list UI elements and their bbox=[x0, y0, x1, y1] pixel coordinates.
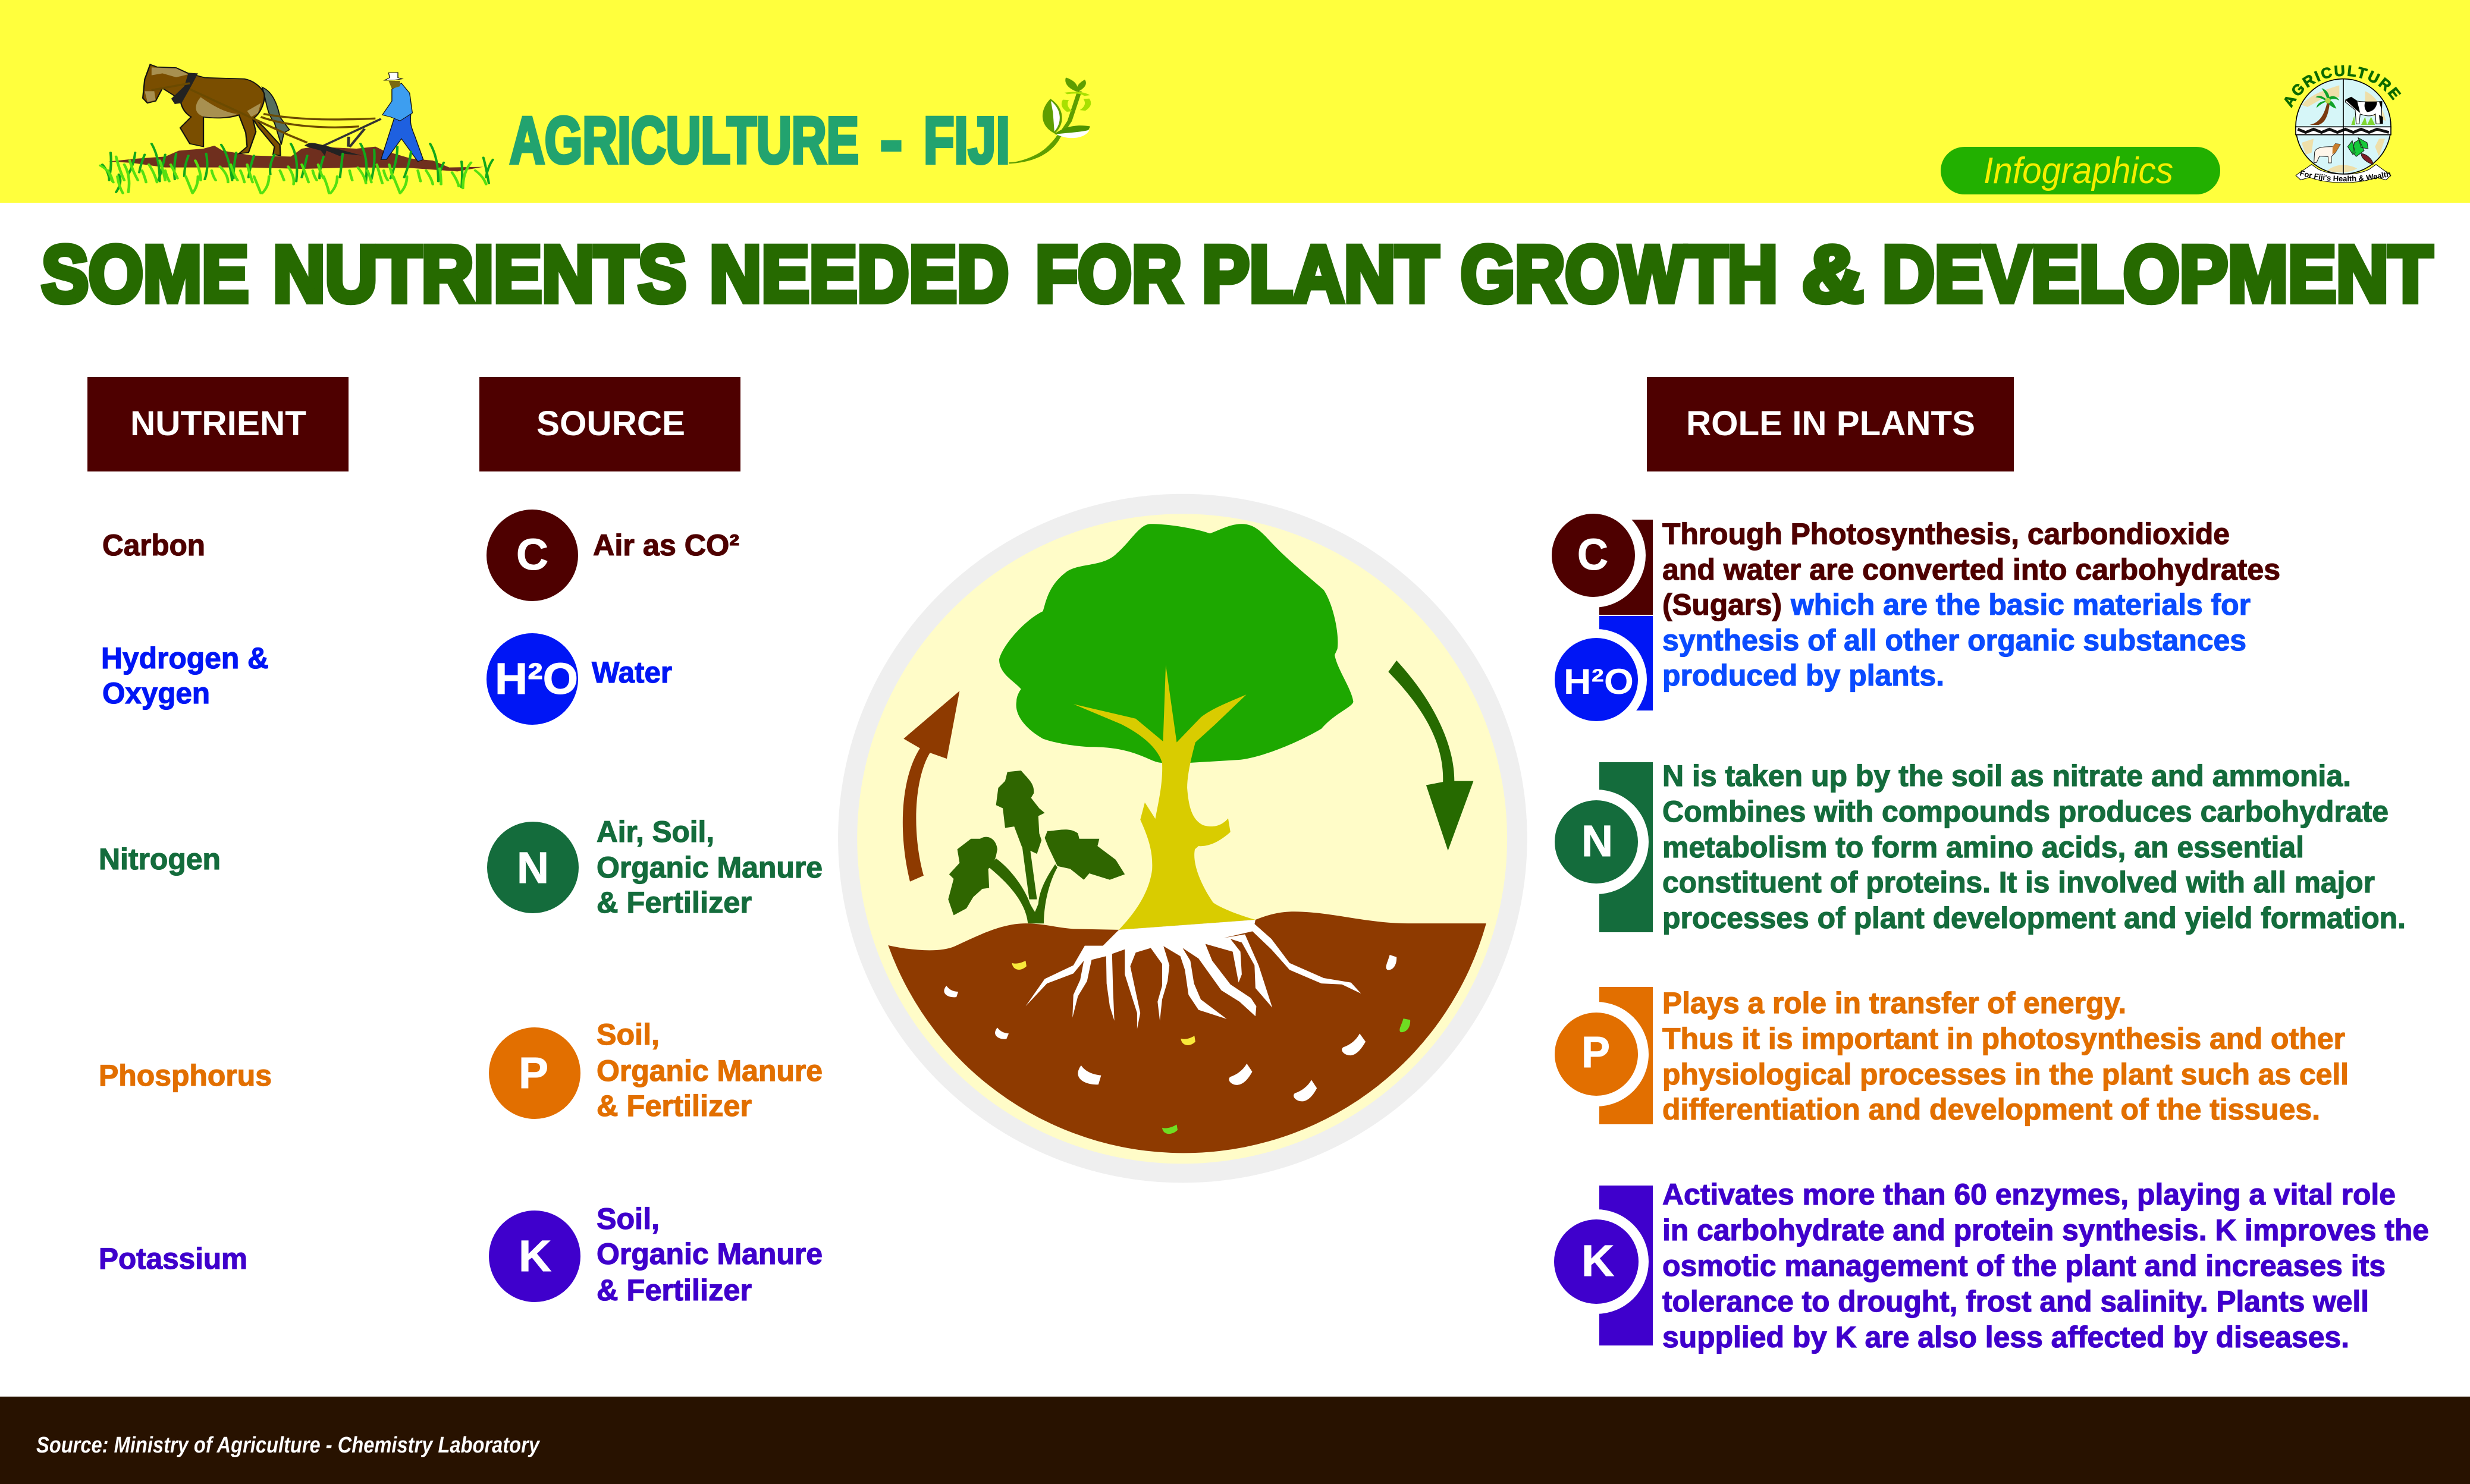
crest text top: AGRICULTURE bbox=[2284, 65, 2402, 108]
tree canopy bbox=[999, 524, 1353, 763]
source: carbon: C bbox=[516, 530, 548, 579]
role text: phosphorus: physiological processes in the plant such as cell bbox=[1662, 1058, 2349, 1091]
column header: Source: SOURCE bbox=[536, 404, 685, 443]
role text: carbon and water: produced by plants. bbox=[1662, 659, 1944, 692]
arrow: down green bbox=[1388, 661, 1473, 851]
nutrient names: Phosphorus bbox=[99, 1059, 272, 1092]
role icon: carbon and water: C bbox=[1577, 530, 1608, 579]
arrow: up brown bbox=[903, 691, 959, 882]
pale background disc bbox=[857, 514, 1507, 1164]
role text: potassium: osmotic management of the plant and increases its bbox=[1662, 1249, 2386, 1282]
header band bbox=[0, 0, 2470, 203]
title: GROWTH bbox=[1461, 230, 1778, 319]
source: carbon bbox=[487, 510, 739, 601]
role text: carbon and water: and water are converted into carbohydrates bbox=[1662, 553, 2280, 586]
role text: nitrogen: constituent of proteins. It is involved with all major bbox=[1662, 866, 2375, 899]
title: FOR bbox=[1035, 230, 1182, 319]
plough bbox=[324, 119, 381, 147]
role text: nitrogen bbox=[1662, 759, 2406, 935]
title: NEEDED bbox=[710, 230, 1009, 319]
role icon: carbon and water bbox=[1541, 503, 1653, 730]
palm tree bbox=[2309, 101, 2330, 125]
illustration: farmer ploughing with horse bbox=[100, 64, 493, 193]
badge: Infographics: Infographics bbox=[1983, 150, 2173, 191]
source: nitrogen bbox=[487, 815, 823, 919]
role icon: potassium bbox=[1544, 1186, 1653, 1345]
icon: leaf sprig bbox=[1009, 77, 1090, 163]
central illustration: tree and soil cycle bbox=[838, 494, 1527, 1183]
crest disc bbox=[2296, 79, 2391, 174]
role text: phosphorus: Thus it is important in photosynthesis and other bbox=[1662, 1022, 2345, 1055]
role text: potassium: supplied by K are also less affected by diseases. bbox=[1662, 1320, 2349, 1354]
source: nitrogen: & Fertilizer bbox=[597, 886, 752, 919]
source: potassium: & Fertilizer bbox=[597, 1274, 752, 1307]
role text: potassium bbox=[1662, 1178, 2429, 1354]
footer band with source: Source: Ministry of Agriculture - Chemistry Laboratory bbox=[36, 1433, 541, 1458]
title: SOME bbox=[42, 230, 249, 319]
soil particles green bbox=[1162, 1018, 1410, 1134]
source: potassium: K bbox=[519, 1231, 551, 1281]
title: NUTRIENTS bbox=[273, 230, 686, 319]
role text: phosphorus: differentiation and development of the tissues. bbox=[1662, 1093, 2320, 1126]
nutrient names: Potassium bbox=[99, 1242, 247, 1275]
emblem: Ministry of Agriculture crest bbox=[2284, 65, 2402, 183]
nutrient names: Nitrogen bbox=[99, 842, 221, 876]
horse collar bbox=[171, 73, 198, 104]
role icon: potassium: K bbox=[1581, 1236, 1614, 1285]
source: phosphorus: Soil, bbox=[597, 1018, 660, 1051]
source: water: Water bbox=[592, 656, 672, 689]
source: water: H²O bbox=[495, 654, 578, 703]
badge: Infographics bbox=[1941, 147, 2220, 194]
soil particles white bbox=[944, 955, 1396, 1101]
source: nitrogen: Organic Manure bbox=[597, 851, 823, 884]
role text: nitrogen: processes of plant development and yield formation. bbox=[1662, 901, 2406, 935]
tree trunk bbox=[1074, 665, 1256, 930]
role icon: phosphorus: P bbox=[1581, 1027, 1610, 1077]
horse light patches bbox=[145, 67, 261, 117]
nutrient names: Carbon bbox=[102, 529, 205, 562]
outer ring bbox=[838, 494, 1527, 1183]
ribbon bbox=[2296, 165, 2391, 183]
role text: potassium: Activates more than 60 enzymes, playing a vital role bbox=[1662, 1178, 2396, 1211]
soil mound bbox=[108, 146, 484, 171]
role text: carbon and water: (Sugars) bbox=[1662, 588, 1782, 621]
source: phosphorus: Organic Manure bbox=[597, 1054, 823, 1087]
farmer shirt bbox=[382, 83, 412, 121]
role icon: nitrogen bbox=[1544, 762, 1653, 932]
role text: carbon and water: Through Photosynthesis, carbondioxide bbox=[1662, 517, 2230, 551]
role text: potassium: in carbohydrate and protein synthesis. K improves the bbox=[1662, 1213, 2429, 1247]
role text: carbon and water bbox=[1662, 517, 2280, 692]
title: PLANT bbox=[1202, 230, 1439, 319]
farmer overalls bbox=[381, 113, 423, 162]
source: potassium: Organic Manure bbox=[597, 1237, 823, 1271]
heading: Agriculture - Fiji: AGRICULTURE bbox=[510, 104, 859, 177]
title bbox=[42, 230, 2433, 319]
sheep bbox=[2314, 144, 2340, 163]
role text: phosphorus bbox=[1662, 986, 2349, 1126]
role icon: nitrogen: N bbox=[1581, 816, 1613, 866]
cow bbox=[2345, 97, 2382, 124]
source: potassium: Soil, bbox=[597, 1202, 660, 1235]
column header: Nutrient: NUTRIENT bbox=[130, 404, 306, 443]
heading: Agriculture - Fiji: - bbox=[880, 104, 902, 177]
soil bbox=[888, 911, 1486, 1153]
column header: Nutrient bbox=[87, 377, 349, 471]
role text: carbon and water: which are the basic materials for bbox=[1790, 588, 2251, 621]
role text: carbon and water: synthesis of all other organic substances bbox=[1662, 624, 2246, 657]
farmer hat bbox=[384, 73, 402, 80]
farmer face bbox=[388, 81, 400, 89]
source: water bbox=[487, 633, 672, 725]
role icon: phosphorus bbox=[1544, 987, 1653, 1124]
nutrient names bbox=[99, 529, 272, 1275]
role text: nitrogen: N is taken up by the soil as nitrate and ammonia. bbox=[1662, 759, 2351, 793]
small plant bbox=[948, 771, 1125, 923]
grass dark blades bbox=[102, 144, 493, 192]
source: carbon: Air as CO² bbox=[593, 529, 739, 562]
nutrient names: Oxygen bbox=[102, 677, 210, 710]
crest text ribbon: For Fiji's Health & Wealth bbox=[2299, 170, 2391, 182]
role text: phosphorus: Plays a role in transfer of energy. bbox=[1662, 986, 2126, 1020]
source: nitrogen: Air, Soil, bbox=[597, 815, 714, 848]
horse tail bbox=[262, 87, 290, 144]
role text: nitrogen: Combines with compounds produces carbohydrate bbox=[1662, 795, 2389, 828]
roots bbox=[1025, 920, 1361, 1029]
footer band with source bbox=[0, 1397, 2470, 1484]
horse body bbox=[143, 64, 281, 156]
role text: potassium: tolerance to drought, frost and salinity. Plants well bbox=[1662, 1285, 2369, 1318]
dalo plant bbox=[2347, 138, 2368, 156]
soil particles yellow bbox=[1012, 961, 1195, 1045]
source: nitrogen: N bbox=[517, 843, 549, 892]
role text: nitrogen: metabolism to form amino acids, an essential bbox=[1662, 831, 2304, 864]
source: phosphorus: & Fertilizer bbox=[597, 1089, 752, 1123]
title: & bbox=[1802, 230, 1863, 319]
column header: Source bbox=[479, 377, 740, 471]
role icon: carbon and water: H²O bbox=[1564, 662, 1634, 702]
column header: Role in plants bbox=[1647, 377, 2014, 471]
grass light blades bbox=[100, 156, 486, 193]
source: phosphorus: P bbox=[519, 1048, 548, 1098]
source: phosphorus bbox=[489, 1018, 823, 1123]
reins bbox=[152, 83, 375, 143]
nutrient names: Hydrogen & bbox=[101, 642, 269, 675]
source: potassium bbox=[489, 1202, 823, 1307]
column header: Role in plants: ROLE IN PLANTS bbox=[1686, 404, 1975, 443]
heading: Agriculture - Fiji: FIJI bbox=[924, 104, 1010, 177]
